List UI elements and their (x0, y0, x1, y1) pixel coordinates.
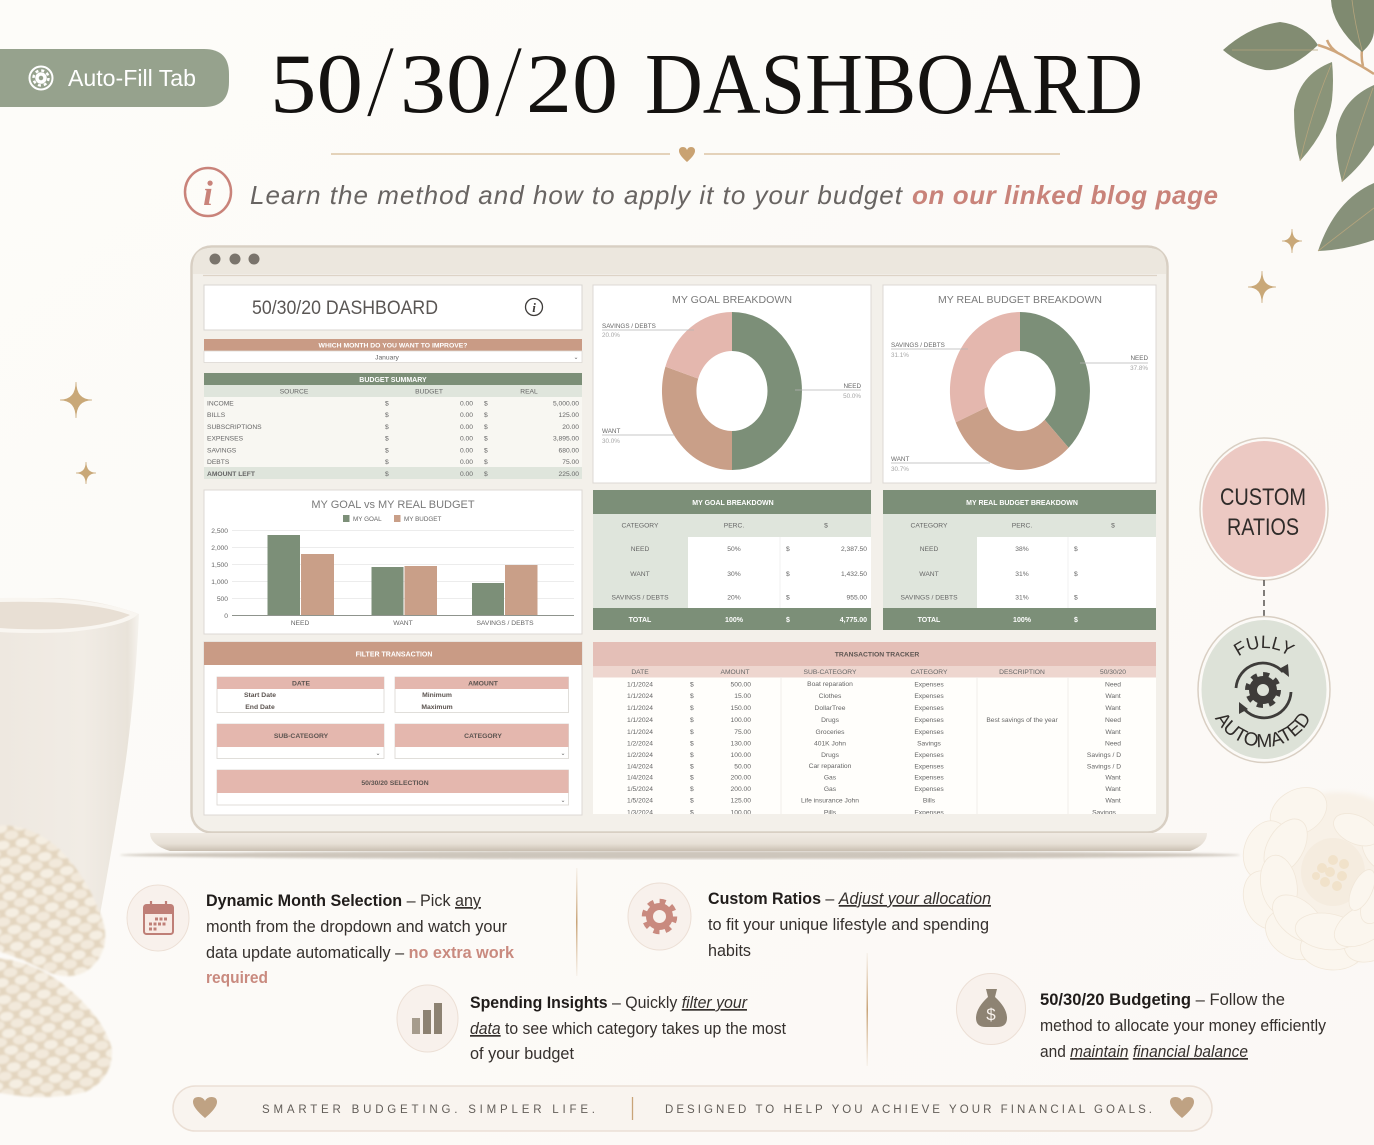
table: transaction tracker: Best savings of the year (986, 717, 1058, 724)
panel: month selector (204, 339, 582, 362)
panel: budget summary table: 680.00 (559, 448, 579, 454)
panel: goal vs real bar chart (204, 490, 582, 634)
donut labels: WANT (891, 456, 909, 463)
donut labels: NEED (1130, 355, 1148, 362)
feature text: Dynamic Month Selection – Pick any (206, 891, 481, 910)
table: transaction tracker: Clothes (819, 693, 842, 700)
panel: filter transaction: FILTER TRANSACTION (356, 652, 432, 658)
table: my goal breakdown: NEED (631, 546, 649, 553)
decoration: coffee mug (0, 598, 139, 925)
badge: custom ratios (1200, 438, 1328, 580)
table: transaction tracker: Drugs (821, 717, 840, 724)
sparkle left small (76, 462, 96, 484)
sub-category filter (217, 724, 384, 758)
table: my real budget breakdown: $ (1074, 594, 1078, 602)
table: my real budget breakdown: WANT (919, 571, 939, 578)
subtitle (250, 180, 1218, 210)
donut labels (602, 323, 861, 445)
donut labels: 31.1% (891, 352, 909, 359)
panel: budget summary table: 0.00 (460, 424, 473, 431)
feature text (1040, 990, 1326, 1061)
panel: budget summary table: SOURCE (280, 388, 309, 396)
table: my real budget breakdown: $ (1074, 546, 1078, 553)
icon: heart left (193, 1097, 217, 1118)
table: transaction tracker: $ (690, 705, 694, 712)
table: my goal breakdown: 2,387.50 (841, 546, 867, 553)
feature: 50/30/20 budgeting (956, 974, 1326, 1061)
table: my goal breakdown: $ (824, 522, 828, 530)
panel: budget summary table: 20.00 (562, 424, 579, 431)
table: my real budget breakdown: 100% (1013, 617, 1032, 624)
table: my real budget breakdown: SAVINGS / DEBTS (900, 594, 958, 602)
title: DASHBOARD (645, 35, 1143, 132)
table: my goal breakdown: $ (786, 546, 790, 553)
table: transaction tracker: 1/4/2024 (627, 764, 653, 770)
table: transaction tracker: 125.00 (731, 798, 751, 804)
panel: budget summary table: 75.00 (562, 459, 579, 466)
donut labels (891, 342, 1148, 473)
title: 20 (526, 37, 618, 131)
panel: budget summary table: EXPENSES (207, 436, 244, 442)
table: transaction tracker: 75.00 (734, 729, 751, 736)
table: my goal breakdown: 1,432.50 (841, 571, 867, 578)
panel: budget summary table: $ (484, 471, 488, 478)
table: transaction tracker: Expenses (914, 786, 944, 793)
table: my real budget breakdown: CATEGORY (911, 522, 948, 530)
donut labels: 30.7% (891, 466, 909, 473)
table: my real budget breakdown: MY REAL BUDGET BREAKDOWN (966, 500, 1078, 507)
table: transaction tracker: $ (690, 682, 694, 688)
panel: budget summary table: BUDGET SUMMARY (359, 377, 427, 384)
date filter: Start Date (244, 692, 276, 699)
table: transaction tracker: 1/1/2024 (627, 693, 653, 700)
table: transaction tracker: 100.00 (731, 752, 751, 759)
sub-category filter: SUB-CATEGORY (274, 733, 329, 740)
icon: auto-fill gear (30, 66, 52, 90)
sub-category filter: ⌄ (375, 751, 381, 757)
panel: budget summary table: AMOUNT LEFT (207, 471, 256, 478)
table: my goal breakdown: 30% (727, 571, 741, 578)
table: transaction tracker: Want (1105, 774, 1121, 782)
panel: budget summary table: $ (385, 471, 389, 478)
sparkle right large (1248, 271, 1276, 303)
table: transaction tracker: 50.00 (734, 764, 751, 770)
table: transaction tracker: 1/2/2024 (627, 740, 653, 748)
panel: budget summary table: 0.00 (460, 448, 473, 454)
panel: budget summary table: $ (385, 400, 389, 408)
amount filter: Maximum (421, 704, 453, 711)
table: transaction tracker: $ (690, 810, 694, 816)
table: transaction tracker: Expenses (914, 774, 944, 782)
table: transaction tracker: Pills (824, 810, 837, 816)
table: transaction tracker: Gas (824, 774, 837, 782)
panel: budget summary table: BILLS (207, 412, 226, 419)
badge: custom ratios: CUSTOM (1220, 484, 1306, 511)
table: transaction tracker: 100.00 (731, 717, 751, 724)
panel: budget summary table: SAVINGS (207, 448, 237, 454)
table: transaction tracker: $ (690, 740, 694, 748)
badge: custom ratios: RATIOS (1227, 514, 1299, 541)
badge: fully automated (1197, 616, 1331, 764)
table: my goal breakdown: 50% (727, 546, 741, 553)
decoration: leaves (1223, 0, 1374, 251)
table: my goal breakdown: CATEGORY (622, 522, 659, 530)
amount filter: AMOUNT (468, 680, 499, 688)
category filter (395, 724, 568, 758)
window dots (210, 254, 260, 264)
50/30/20 filter: 50/30/20 SELECTION (361, 780, 429, 787)
amount filter: Minimum (422, 692, 452, 699)
chart category labels: WANT (393, 620, 413, 627)
panel: budget summary table (204, 373, 582, 479)
table: my real budget breakdown: NEED (920, 546, 938, 553)
panel: filter transaction (204, 642, 582, 815)
table: transaction tracker: Groceries (816, 729, 845, 736)
panel: budget summary table: $ (385, 459, 389, 466)
feature text: and maintain financial balance (1040, 1042, 1248, 1061)
feature text: to fit your unique lifestyle and spending (708, 915, 989, 934)
category filter: CATEGORY (464, 733, 502, 740)
table: my real budget breakdown: 38% (1015, 546, 1029, 553)
table: my goal breakdown: SAVINGS / DEBTS (611, 594, 669, 602)
table: transaction tracker: Savings / D (1087, 752, 1121, 759)
panel: budget summary table: 0.00 (460, 412, 473, 419)
panel: budget summary table: $ (484, 459, 488, 466)
panel: month selector: ⌄ (573, 355, 579, 361)
table: transaction tracker: 401K John (814, 740, 846, 748)
title (270, 24, 1143, 139)
table: transaction tracker: Drugs (821, 752, 840, 759)
subtitle: on our linked blog page (912, 180, 1218, 210)
feature: spending insights (397, 985, 786, 1063)
table: transaction tracker: Expenses (914, 693, 944, 700)
panel: my goal breakdown donut (593, 285, 871, 483)
table: transaction tracker: Want (1105, 786, 1121, 793)
table: my real budget breakdown: $ (1111, 522, 1115, 530)
table: my goal breakdown: WANT (630, 571, 650, 578)
table: transaction tracker: 130.00 (731, 740, 751, 748)
icon: calendar (127, 885, 189, 951)
connector between badges (1263, 580, 1265, 617)
table: my real budget breakdown: 31% (1015, 594, 1029, 602)
table: transaction tracker: $ (690, 752, 694, 759)
donut title: MY GOAL BREAKDOWN (672, 294, 792, 306)
panel: budget summary table: $ (484, 400, 488, 408)
panel: budget summary table: 3,895.00 (553, 436, 579, 442)
table: transaction tracker: DATE (631, 669, 649, 676)
feature text (708, 889, 991, 960)
icon: heart right (1170, 1097, 1194, 1118)
table: my real budget breakdown (883, 490, 1156, 630)
table: my real budget breakdown: 31% (1015, 571, 1029, 578)
title: 50 (270, 37, 363, 131)
title: / (366, 24, 395, 139)
icon: gear (628, 883, 691, 950)
chart legend (343, 515, 441, 523)
table: my goal breakdown: $ (786, 594, 790, 602)
panel: budget summary table: 0.00 (460, 400, 473, 408)
badge: fully automated: FULLY (1233, 636, 1296, 656)
donut chart (950, 312, 1090, 470)
table: transaction tracker: Savings / D (1087, 764, 1121, 770)
table: transaction tracker: $ (690, 798, 694, 804)
table: transaction tracker: Savings (917, 740, 942, 748)
donut labels: 20.0% (602, 332, 620, 339)
amount filter (395, 677, 568, 712)
icon: gear with arrows (1236, 663, 1291, 718)
footer text left: SMARTER BUDGETING. SIMPLER LIFE. (262, 1104, 595, 1116)
panel: budget summary table: 0.00 (460, 471, 473, 478)
table: transaction tracker: Expenses (914, 764, 944, 770)
date filter: DATE (292, 680, 310, 688)
chart category labels (291, 620, 534, 627)
50/30/20 filter (217, 770, 568, 805)
table: transaction tracker: Need (1105, 682, 1121, 688)
table: transaction tracker: 1/2/2024 (627, 752, 653, 759)
table: transaction tracker: Expenses (914, 810, 944, 816)
table: transaction tracker: $ (690, 774, 694, 782)
feature: dynamic month selection (127, 885, 515, 987)
table: transaction tracker: 50/30/20 (1100, 669, 1126, 676)
feature text (206, 891, 515, 987)
panel: month selector: WHICH MONTH DO YOU WANT TO IMPROVE? (319, 342, 467, 350)
donut labels: WANT (602, 428, 620, 435)
donut labels: 30.0% (602, 438, 620, 445)
table: my real budget breakdown: $ (1074, 571, 1078, 578)
table: transaction tracker: Life insurance John (801, 798, 859, 804)
chart category labels: SAVINGS / DEBTS (476, 620, 534, 627)
table: transaction tracker: SUB-CATEGORY (804, 669, 857, 676)
section divider left (576, 868, 578, 976)
table: transaction tracker: $ (690, 729, 694, 736)
table: transaction tracker: 1/5/2024 (627, 798, 653, 804)
feature text: Custom Ratios – Adjust your allocation (708, 889, 991, 908)
table: transaction tracker: Boat reparation (807, 681, 853, 688)
chart category labels: NEED (291, 620, 309, 627)
chart legend: MY GOAL (353, 516, 382, 523)
table: my goal breakdown: 100% (725, 617, 744, 624)
chart axis labels: 2,000 (211, 545, 228, 552)
panel: budget summary table: INCOME (207, 400, 234, 408)
table: my goal breakdown: PERC. (724, 522, 744, 530)
table: my real budget breakdown: PERC. (1012, 522, 1032, 530)
subtitle: Learn the method and how to apply it to your budget (250, 180, 904, 210)
title: 30 (400, 37, 492, 131)
table: transaction tracker: $ (690, 693, 694, 700)
laptop base (150, 833, 1207, 851)
table: transaction tracker: 1/5/2024 (627, 786, 653, 793)
donut chart (662, 312, 802, 470)
table: transaction tracker: Savings (1092, 810, 1117, 816)
icon: bar chart (397, 985, 458, 1052)
panel title text: 50/30/20 DASHBOARD (252, 298, 438, 319)
icon: info (185, 168, 231, 216)
table: transaction tracker: Expenses (914, 682, 944, 688)
category filter: ⌄ (560, 751, 566, 757)
feature text: method to allocate your money efficiently (1040, 1016, 1326, 1035)
icon: small info: i (532, 300, 536, 315)
chart axis labels: 1,500 (211, 562, 228, 569)
chart axis labels: 2,500 (211, 528, 228, 535)
panel: budget summary table: 5,000.00 (553, 400, 579, 408)
chart axis labels (211, 528, 228, 620)
icon: money bag (956, 974, 1026, 1044)
donut labels: SAVINGS / DEBTS (602, 323, 656, 330)
feature: custom ratios (628, 883, 991, 960)
panel: budget summary table: $ (385, 436, 389, 442)
table: transaction tracker: 1/4/2024 (627, 774, 653, 782)
icon: small info (526, 298, 542, 316)
table: transaction tracker: Want (1105, 705, 1121, 712)
date filter: End Date (245, 704, 275, 711)
title: / (494, 24, 523, 139)
table: transaction tracker: $ (690, 717, 694, 724)
table: transaction tracker: Want (1105, 798, 1121, 804)
table: transaction tracker: $ (690, 764, 694, 770)
icon: info: i (203, 174, 213, 213)
table: transaction tracker: Expenses (914, 705, 944, 712)
chart axis labels: 500 (217, 596, 228, 603)
50/30/20 filter: ⌄ (560, 798, 566, 804)
feature text: 50/30/20 Budgeting – Follow the (1040, 990, 1285, 1009)
table: my goal breakdown: TOTAL (629, 617, 652, 624)
feature text: habits (708, 941, 751, 960)
panel: budget summary table: $ (385, 448, 389, 454)
feature text: data update automatically – no extra work (206, 943, 515, 962)
table: transaction tracker: Gas (824, 786, 837, 793)
section divider right (866, 953, 868, 1066)
feature text: required (206, 968, 268, 987)
table: transaction tracker: 1/3/2024 (627, 810, 653, 816)
table: transaction tracker: Car reparation (809, 763, 852, 770)
table: transaction tracker: 15.00 (734, 693, 751, 700)
panel: budget summary table: $ (484, 424, 488, 431)
table: transaction tracker: 1/1/2024 (627, 705, 653, 712)
feature text: month from the dropdown and watch your (206, 917, 507, 936)
table: transaction tracker: DollarTree (815, 705, 846, 712)
browser bar (193, 248, 1166, 274)
donut title: MY REAL BUDGET BREAKDOWN (938, 294, 1102, 306)
panel: budget summary table: 225.00 (559, 471, 579, 478)
badge: fully automated: AUTOMATED (1214, 714, 1308, 748)
panel: budget summary table: $ (484, 412, 488, 419)
sparkle right small (1282, 229, 1302, 253)
table: my goal breakdown (593, 490, 871, 630)
table: my goal breakdown: 955.00 (847, 594, 867, 602)
feature text: data to see which category takes up the most (470, 1019, 786, 1038)
donut labels: NEED (844, 383, 861, 390)
table: transaction tracker: 200.00 (731, 786, 751, 793)
table: transaction tracker: 1/1/2024 (627, 682, 653, 688)
decoration: knitted blanket (0, 826, 112, 1097)
table: my goal breakdown: MY GOAL BREAKDOWN (692, 500, 774, 507)
table: transaction tracker: Need (1105, 717, 1121, 724)
laptop (120, 246, 1240, 859)
chart title: MY GOAL vs MY REAL BUDGET (311, 499, 475, 511)
panel: budget summary table: $ (484, 448, 488, 454)
table: my goal breakdown: $ (786, 571, 790, 578)
date filter (217, 677, 384, 712)
panel: budget summary table: 0.00 (460, 459, 473, 466)
table: transaction tracker: 1/1/2024 (627, 729, 653, 736)
icon: money bag: $ (986, 1005, 996, 1024)
table: transaction tracker: CATEGORY (911, 669, 948, 676)
table: transaction tracker: Expenses (914, 717, 944, 724)
table: transaction tracker: Expenses (914, 752, 944, 759)
panel: budget summary table: 0.00 (460, 436, 473, 442)
table: my goal breakdown: 4,775.00 (840, 617, 867, 624)
table: transaction tracker (593, 642, 1156, 816)
title divider with heart (331, 147, 1060, 162)
panel: month selector: January (375, 354, 400, 362)
table: transaction tracker: DESCRIPTION (999, 669, 1045, 676)
table: transaction tracker: Expenses (914, 729, 944, 736)
sparkle left large (60, 382, 92, 418)
table: transaction tracker: Want (1105, 729, 1121, 736)
table: my real budget breakdown: TOTAL (918, 617, 941, 624)
table: transaction tracker: 150.00 (731, 705, 751, 712)
table: transaction tracker: AMOUNT (721, 669, 749, 676)
feature text (470, 993, 786, 1063)
chart axis labels: 0 (224, 613, 228, 620)
panel: budget summary table: BUDGET (415, 388, 443, 396)
panel: budget summary table: $ (484, 436, 488, 442)
badge: auto-fill tab (0, 49, 229, 107)
table: my goal breakdown: 20% (727, 594, 741, 602)
panel: budget summary table: $ (385, 412, 389, 419)
badge label: Auto-Fill Tab (68, 65, 196, 91)
panel: budget summary table: 125.00 (559, 412, 579, 419)
decoration: cream flower (1235, 778, 1374, 973)
donut labels: 50.0% (843, 393, 861, 400)
table: transaction tracker: Want (1105, 693, 1121, 700)
donut labels: 37.8% (1130, 365, 1148, 372)
laptop shadow (120, 851, 1240, 859)
table: transaction tracker: Bills (923, 798, 936, 804)
table: transaction tracker: TRANSACTION TRACKER (835, 652, 919, 658)
panel: my real budget breakdown donut (883, 285, 1156, 483)
feature text: of your budget (470, 1044, 574, 1063)
table: transaction tracker: 1/1/2024 (627, 717, 653, 724)
table: transaction tracker: 200.00 (731, 774, 751, 782)
laptop screen frame (192, 246, 1168, 832)
table: transaction tracker: 100.00 (731, 810, 751, 816)
chart axis labels: 1,000 (211, 579, 228, 586)
chart bars (268, 535, 538, 615)
panel: budget summary table: SUBSCRIPTIONS (207, 424, 262, 431)
table: transaction tracker: Need (1105, 740, 1121, 748)
footer text right: DESIGNED TO HELP YOU ACHIEVE YOUR FINANCIAL GOALS. (665, 1104, 1152, 1116)
feature text: Spending Insights – Quickly filter your (470, 993, 748, 1012)
panel: budget summary table: DEBTS (207, 459, 230, 466)
panel: budget summary table: $ (385, 424, 389, 431)
panel: dashboard title (204, 285, 582, 330)
footer banner (173, 1086, 1212, 1131)
donut labels: SAVINGS / DEBTS (891, 342, 945, 349)
table: transaction tracker: 500.00 (731, 682, 751, 688)
chart legend: MY BUDGET (404, 516, 441, 523)
table: my goal breakdown: $ (786, 617, 790, 624)
table: my real budget breakdown: $ (1074, 617, 1078, 624)
panel: budget summary table: REAL (520, 388, 538, 396)
table: transaction tracker: $ (690, 786, 694, 793)
